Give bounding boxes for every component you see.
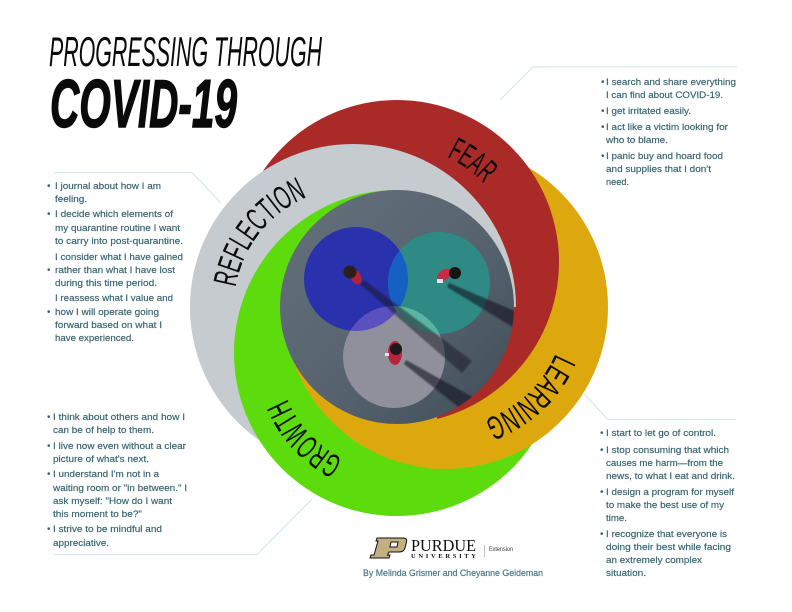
learning statements: I recognize that everyone is <box>606 528 727 539</box>
photo: three people standing in overlapping circles <box>280 190 524 424</box>
ring: learning overlap <box>293 360 437 469</box>
label: learning: LEARNING <box>487 355 576 439</box>
growth statements: I live now even without a clear <box>53 440 186 451</box>
panel: fear <box>500 67 737 187</box>
fear statements: • <box>601 151 605 162</box>
reflection statements: I journal about how I am <box>55 180 161 191</box>
learning statements: to make the best use of my <box>606 499 724 510</box>
wordmark: Purdue: PURDUE <box>411 536 476 555</box>
reflection statements: I reassess what I value and <box>55 292 173 303</box>
reflection statements: during this time period. <box>55 277 157 288</box>
growth statements: can be of help to them. <box>53 424 154 435</box>
title: PROGRESSING THROUGH <box>49 28 323 75</box>
growth statements: waiting room or "in between." I <box>52 482 187 493</box>
spiral diagram <box>190 100 608 516</box>
reflection statements: to carry into post-quarantine. <box>55 235 183 246</box>
callout line: fear <box>500 67 737 100</box>
growth statements: I strive to be mindful and <box>53 523 162 534</box>
learning statements: situation. <box>606 567 646 578</box>
reflection statements <box>47 180 183 343</box>
growth statements: this moment to be?" <box>53 508 142 519</box>
reflection statements: rather than what I have lost <box>55 264 175 275</box>
reflection statements: I consider what I have gained <box>55 251 183 262</box>
growth statements: ask myself: "How do I want <box>53 495 172 506</box>
reflection statements: how I will operate going <box>55 306 159 317</box>
learning statements: I design a program for myself <box>606 486 734 497</box>
learning statements <box>600 427 735 578</box>
reflection statements: have experienced. <box>55 332 134 343</box>
label: reflection: REFLECTION <box>214 177 306 286</box>
fear statements: • <box>601 77 605 88</box>
logo: Purdue University Extension <box>370 536 513 560</box>
byline: By Melinda Grismer and Cheyanne Geideman <box>363 567 543 578</box>
wordmark: University: UNIVERSITY <box>411 553 476 560</box>
reflection statements: I decide which elements of <box>55 208 173 219</box>
fear statements: I panic buy and hoard food <box>606 150 723 161</box>
reflection statements: my quarantine routine I want <box>55 222 180 233</box>
learning statements: I stop consuming that which <box>606 444 729 455</box>
growth statements: appreciative. <box>53 537 109 548</box>
learning statements: causes me harm—from the <box>606 457 723 468</box>
fear statements: I can find about COVID-19. <box>606 89 723 100</box>
ring: reflection <box>190 144 516 470</box>
fear statements <box>601 76 736 187</box>
label: growth: GROWTH <box>267 400 340 476</box>
growth statements: I understand I'm not in a <box>53 468 160 479</box>
fear statements: • <box>601 106 605 117</box>
learning statements: • <box>600 445 604 456</box>
panel: learning <box>584 394 736 578</box>
fear statements: need. <box>606 176 629 187</box>
fear statements: I act like a victim looking for <box>606 121 728 132</box>
callout line: learning <box>584 394 736 420</box>
callout line: reflection <box>54 172 221 203</box>
growth statements <box>47 411 187 548</box>
reflection statements: • <box>47 181 51 192</box>
learning statements: • <box>600 428 604 439</box>
panel: reflection <box>47 172 221 343</box>
ring: learning base <box>284 145 608 469</box>
wordmark: Extension: Extension <box>489 546 513 553</box>
fear statements: I search and share everything <box>606 76 736 87</box>
fear statements: • <box>601 122 605 133</box>
ring: growth overlap <box>234 190 397 516</box>
ring: fear <box>235 100 559 424</box>
fear statements: and supplies that I don't <box>606 163 711 174</box>
reflection statements: • <box>47 307 51 318</box>
reflection statements: • <box>47 209 51 220</box>
learning statements: doing their best while facing <box>606 541 731 552</box>
divider <box>483 545 486 557</box>
title: COVID-19 <box>50 66 237 142</box>
learning statements: • <box>600 487 604 498</box>
learning statements: news, to what I eat and drink. <box>606 470 735 481</box>
growth statements: • <box>47 441 51 452</box>
label: fear: FEAR <box>448 137 497 183</box>
learning statements: an extremely complex <box>606 554 702 565</box>
reflection statements: • <box>47 265 51 276</box>
callout line: growth <box>54 499 312 554</box>
growth statements: • <box>47 412 51 423</box>
growth statements: • <box>47 469 51 480</box>
learning statements: I start to let go of control. <box>606 427 716 438</box>
title <box>49 28 323 142</box>
fear statements: who to blame. <box>605 134 668 145</box>
growth statements: picture of what's next. <box>53 453 149 464</box>
panel: growth <box>47 411 312 554</box>
learning statements: • <box>600 529 604 540</box>
growth statements: I think about others and how I <box>53 411 185 422</box>
growth statements: • <box>47 524 51 535</box>
ring: growth base <box>234 190 560 516</box>
learning statements: time. <box>606 512 627 523</box>
reflection statements: feeling. <box>55 193 87 204</box>
reflection statements: forward based on what I <box>55 319 162 330</box>
icon: Purdue P <box>370 538 407 558</box>
fear statements: I get irritated easily. <box>606 105 691 116</box>
